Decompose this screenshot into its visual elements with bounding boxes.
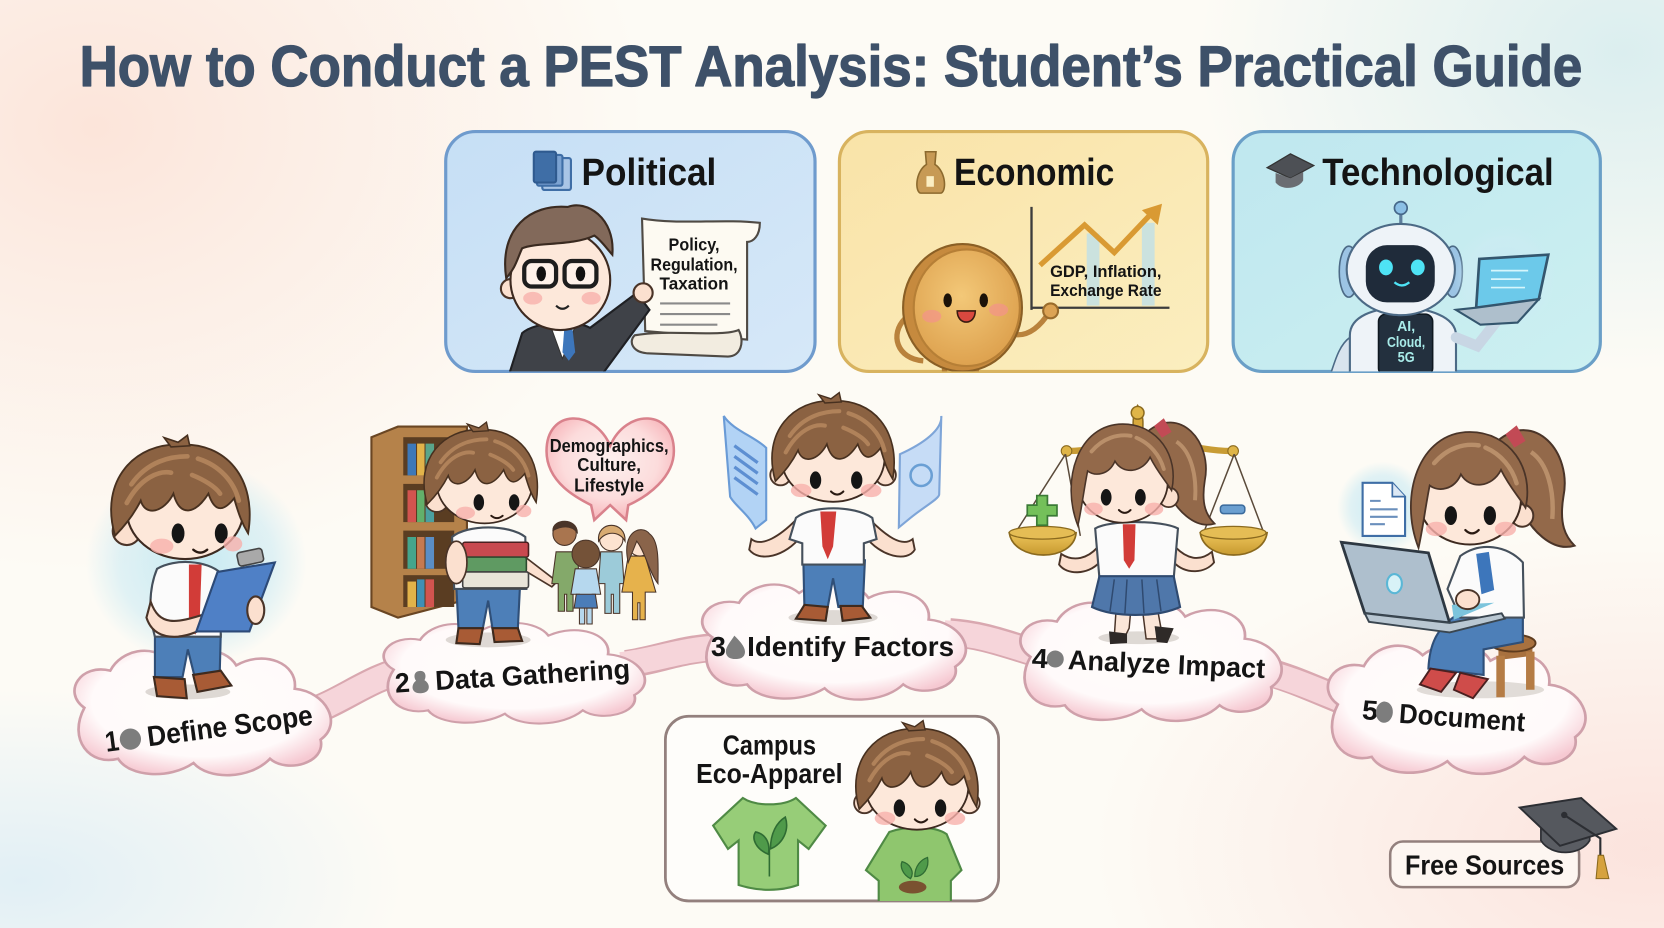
connector bands between steps (302, 632, 1353, 715)
illustration: scroll (632, 219, 760, 357)
stool (1491, 635, 1536, 697)
balance scale beam (1009, 405, 1267, 555)
boy in green shirt (854, 721, 980, 904)
heading: economic: Economic (954, 151, 1114, 194)
example title: Eco-Apparel (696, 758, 843, 789)
label: heart text: Demographics, (550, 436, 669, 456)
label: step 1 (103, 700, 315, 759)
label: step 3: Identify Factors (747, 631, 954, 662)
label: step 1: Define Scope (145, 700, 315, 753)
label: step 5: Document (1398, 698, 1526, 738)
free sources badge (1390, 798, 1616, 887)
label: heart text: Lifestyle (574, 475, 644, 495)
boy with holographic panels (749, 393, 915, 621)
illustration: glowing laptop (1454, 225, 1556, 331)
label: scroll text: Taxation (660, 274, 729, 294)
panel: economic (839, 132, 1208, 377)
label: robot chest text (1388, 321, 1424, 362)
boy with stack of books (424, 422, 557, 644)
label: robot chest text: AI, (1397, 319, 1415, 335)
icon: money bag (917, 152, 945, 193)
illustration: coin character (897, 244, 1058, 377)
boy with clipboard (111, 435, 275, 699)
holographic panel right (899, 416, 941, 527)
step 1: define scope (86, 435, 315, 759)
label: step 3: 3 (711, 631, 726, 662)
label: step 2: 2 (394, 667, 411, 699)
icon: minus (1220, 505, 1245, 514)
label: robot chest text: Cloud, (1387, 335, 1425, 351)
icon: plus (1027, 496, 1057, 525)
label: heart text (550, 436, 669, 495)
label: scroll text: Policy, (669, 234, 720, 254)
label: step 1: 1 (103, 725, 121, 759)
label: step 2: Data Gathering (434, 653, 631, 696)
badge label: Free Sources (1405, 849, 1564, 880)
people group (552, 521, 658, 624)
label: scroll text: Regulation, (651, 255, 738, 275)
girl with skirt (1059, 418, 1215, 644)
step 2: data gathering (371, 418, 674, 699)
label: step 4: 4 (1031, 643, 1049, 674)
heart speech bubble (547, 418, 674, 520)
glow behind boy (86, 461, 307, 664)
label: step 4: Analyze Impact (1067, 644, 1266, 684)
label: scroll text (651, 234, 738, 294)
cloud: step 4 (1020, 601, 1282, 721)
label: robot chest text: 5G (1398, 350, 1415, 366)
label: chart text: Exchange Rate (1050, 282, 1162, 300)
title: How to Conduct a PEST Analysis: Student’s Practical Guide (80, 35, 1582, 99)
label: chart text (1050, 263, 1162, 300)
girl with laptop (1341, 425, 1575, 698)
cloud: step 3 (702, 583, 966, 700)
step 5: document (1337, 425, 1575, 738)
illustration: robot (1331, 202, 1501, 376)
icon: glowing document (1337, 462, 1428, 553)
example title: Campus (723, 729, 816, 760)
icon: green t-shirt with leaf (713, 798, 826, 890)
illustration: politician in suit (501, 205, 653, 374)
panel: technological (1233, 132, 1600, 376)
label: heart text: Culture, (577, 455, 641, 475)
heading: political: Political (582, 151, 716, 194)
chart: rising line (1032, 204, 1169, 310)
example title (696, 729, 843, 789)
panel: campus eco-apparel example (665, 716, 999, 904)
icon: graduation cap (1267, 154, 1314, 188)
label: chart text: GDP, Inflation, (1050, 263, 1162, 281)
step 3: identify factors (711, 393, 954, 662)
heading: technological: Technological (1322, 151, 1554, 194)
label: step 5 (1361, 694, 1526, 738)
cloud detail shadow (446, 632, 531, 647)
icon: graduation cap (1520, 798, 1616, 879)
icon: books (534, 152, 571, 190)
panel: political (446, 132, 815, 374)
holographic panel left (724, 416, 766, 528)
cloud: step 2 (384, 623, 645, 724)
step 4: analyze impact (1009, 405, 1267, 684)
bookshelf (371, 427, 467, 618)
cloud: step 5 (1328, 644, 1586, 774)
label: step 5: 5 (1361, 694, 1379, 726)
cloud: step 1 (75, 649, 331, 775)
